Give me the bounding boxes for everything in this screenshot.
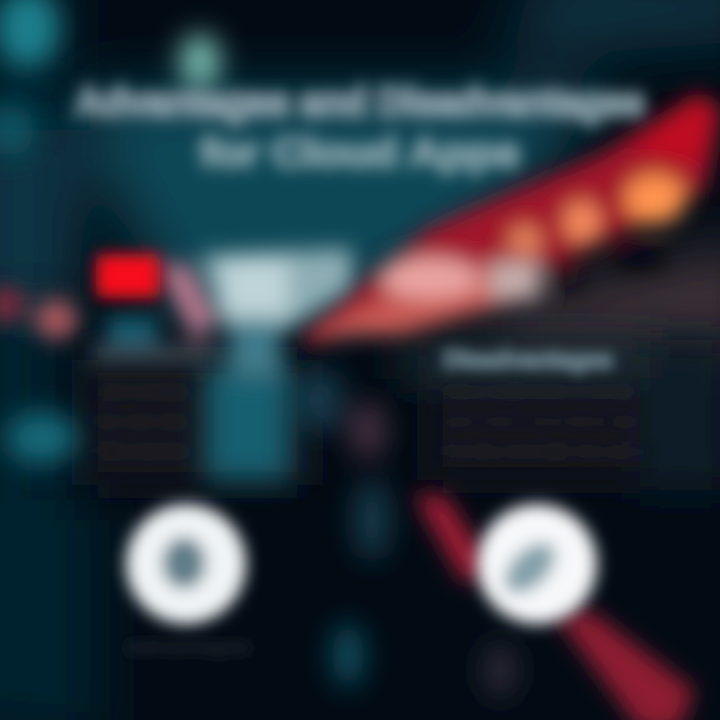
- icon caption: Advantages: [128, 639, 248, 656]
- left column body text: Works anywhere: [92, 443, 192, 460]
- title: Advantages and Disadvantages: [75, 78, 645, 125]
- column heading: right: Disadvantages: [443, 344, 613, 374]
- title: [75, 78, 645, 175]
- right column body text: Less control over stored data: [440, 413, 640, 430]
- decorative teal glows: [0, 0, 516, 698]
- red heading badge: [96, 254, 160, 298]
- icon: right circle: [477, 504, 597, 624]
- light centre panel: [90, 248, 352, 380]
- right column body text: Needs a stable internet connection: [440, 383, 640, 400]
- icon: left circle: [126, 504, 246, 624]
- left column body text: Lower cost upfront: [92, 383, 193, 400]
- title: for Cloud Apps: [200, 131, 520, 175]
- left column body text: Fast, easy setup: [92, 413, 192, 430]
- left column body text: [92, 383, 193, 460]
- decorative red diagonal band: [300, 92, 720, 720]
- decorative red streak left: [0, 287, 78, 339]
- right column body text: Recurring subscription fees add up: [440, 443, 650, 460]
- right column body text: [440, 383, 650, 460]
